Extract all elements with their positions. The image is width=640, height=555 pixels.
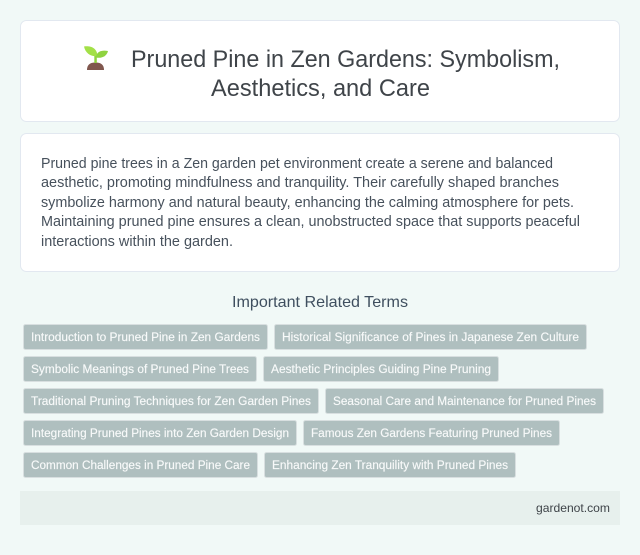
text block: description: Pruned pine trees in a Zen garden pet environment create a serene and balanced bbox=[41, 156, 553, 172]
tag: Integrating Pruned Pines into Zen Garden Design bbox=[31, 426, 289, 440]
tag bbox=[24, 356, 256, 382]
text block: description: symbolize harmony and natural beauty, enhancing the calming atmosphere for pets. bbox=[41, 195, 574, 211]
tag: Aesthetic Principles Guiding Pine Pruning bbox=[271, 362, 491, 376]
title bbox=[131, 46, 560, 102]
tag bbox=[24, 452, 258, 478]
tag: Symbolic Meanings of Pruned Pine Trees bbox=[31, 362, 249, 376]
text block: description bbox=[41, 156, 580, 250]
tag: Enhancing Zen Tranquility with Pruned Pines bbox=[272, 458, 508, 472]
tag: Introduction to Pruned Pine in Zen Gardens bbox=[31, 330, 260, 344]
title: Pruned Pine in Zen Gardens: Symbolism, bbox=[131, 46, 560, 73]
tag bbox=[264, 452, 516, 478]
tag: Common Challenges in Pruned Pine Care bbox=[31, 458, 250, 472]
footer bbox=[20, 491, 620, 525]
panel: related term tags bbox=[24, 324, 604, 478]
tag bbox=[326, 388, 604, 414]
tag bbox=[304, 420, 560, 446]
tag bbox=[24, 324, 268, 350]
panel: header bbox=[20, 20, 620, 122]
tag bbox=[24, 388, 318, 414]
tag bbox=[264, 356, 498, 382]
text block: description: Maintaining pruned pine ensures a clean, unobstructed space that supports peaceful bbox=[41, 214, 580, 230]
icon: seedling bbox=[84, 46, 108, 70]
tag: Historical Significance of Pines in Japanese Zen Culture bbox=[282, 330, 579, 344]
footer: gardenot.com bbox=[536, 501, 610, 515]
panel: description bbox=[20, 134, 620, 272]
tag bbox=[24, 420, 296, 446]
heading: related terms: Important Related Terms bbox=[232, 294, 408, 311]
tag bbox=[274, 324, 586, 350]
tag: Famous Zen Gardens Featuring Pruned Pines bbox=[311, 426, 552, 440]
title: Aesthetics, and Care bbox=[211, 75, 430, 102]
text block: description: aesthetic, promoting mindfulness and tranquility. Their carefully shaped branches bbox=[41, 175, 559, 191]
tag: Seasonal Care and Maintenance for Pruned Pines bbox=[333, 394, 596, 408]
text block: description: interactions within the garden. bbox=[41, 234, 233, 250]
tag: Traditional Pruning Techniques for Zen Garden Pines bbox=[31, 394, 311, 408]
